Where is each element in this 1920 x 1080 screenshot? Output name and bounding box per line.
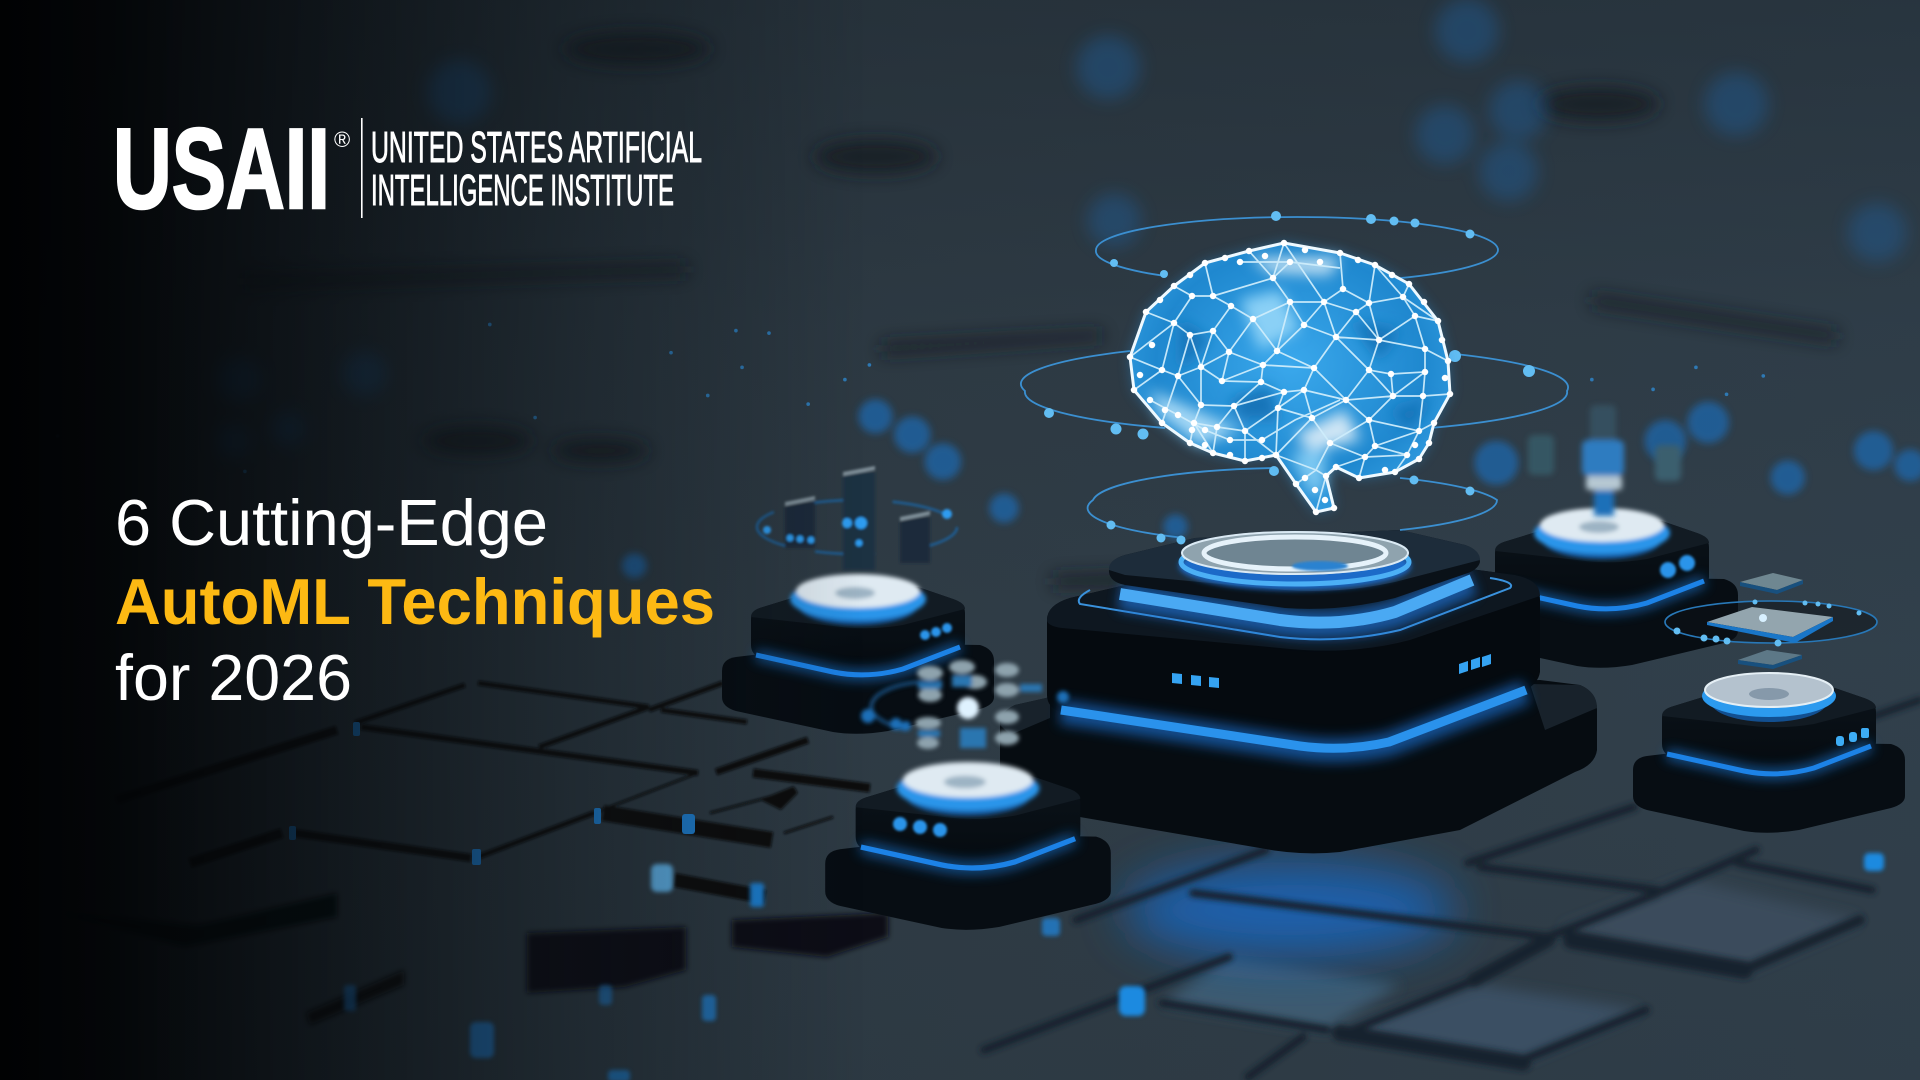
status lights xyxy=(1836,728,1869,746)
crisp grooves in focus plane xyxy=(116,683,870,897)
logo: USAII xyxy=(113,106,702,233)
brain outline xyxy=(1130,243,1450,512)
logo subtitle line 1: UNITED STATES ARTIFICIAL xyxy=(371,123,702,172)
pod: left platform with towers xyxy=(722,466,994,734)
registered mark: ® xyxy=(334,127,350,152)
pod: far right platform with chip xyxy=(1633,573,1905,833)
logo divider xyxy=(361,118,363,218)
pod: front center platform xyxy=(825,762,1111,930)
bokeh: faint upper blurred particles xyxy=(216,0,1907,458)
brain shading patches xyxy=(1150,258,1430,495)
thin cyan loop xyxy=(1079,578,1511,639)
brain: glowing polygon mesh hologram xyxy=(1130,243,1450,512)
pedestal disc glass xyxy=(1702,673,1836,722)
brain mesh nodes xyxy=(1130,243,1450,512)
title line 2 highlighted: AutoML Techniques xyxy=(115,565,715,638)
logo wordmark: USAII xyxy=(113,106,330,233)
dark foreground blocks xyxy=(61,893,888,1025)
icon: blurred tower stack xyxy=(1528,405,1681,516)
upper blurred bands xyxy=(245,32,1837,588)
main platform: stepped base with glowing strips xyxy=(1000,530,1597,853)
scattered particles xyxy=(58,324,1763,471)
glowing pedestal disc xyxy=(1179,531,1411,590)
block top surface xyxy=(1047,565,1540,651)
pod: rear right platform xyxy=(1466,405,1738,668)
title block xyxy=(115,486,715,714)
icon: floating towers xyxy=(757,466,957,570)
lower glowing strip xyxy=(1061,692,1526,750)
status lights xyxy=(1660,555,1695,578)
bokeh: mid blurred particles xyxy=(622,399,1920,578)
far right tile grooves, soft focus xyxy=(984,700,1920,1077)
status lights xyxy=(920,623,952,640)
title line 3: for 2026 xyxy=(115,641,352,714)
icon: floating chips and ring xyxy=(1665,573,1877,669)
brain glow xyxy=(1130,243,1450,512)
cylinder cluster between platforms xyxy=(861,660,1069,749)
bluish lit tiles and floor glow xyxy=(1125,862,1860,1060)
glowing band under top tier xyxy=(1120,582,1472,625)
base tier xyxy=(1000,680,1597,853)
blue junction lights on the board xyxy=(289,722,1884,1080)
top tier xyxy=(1109,530,1480,609)
LED indicators xyxy=(1172,654,1491,688)
base top surface xyxy=(1000,684,1597,735)
status lights xyxy=(893,817,947,837)
logo subtitle line 2: INTELLIGENCE INSTITUTE xyxy=(371,166,674,215)
brain body xyxy=(1130,243,1450,512)
partial ring xyxy=(871,682,940,730)
main block xyxy=(1047,565,1540,748)
brain mesh lines xyxy=(1130,243,1450,512)
orbit rings with nodes xyxy=(1021,211,1568,544)
title line 1: 6 Cutting-Edge xyxy=(115,486,548,559)
